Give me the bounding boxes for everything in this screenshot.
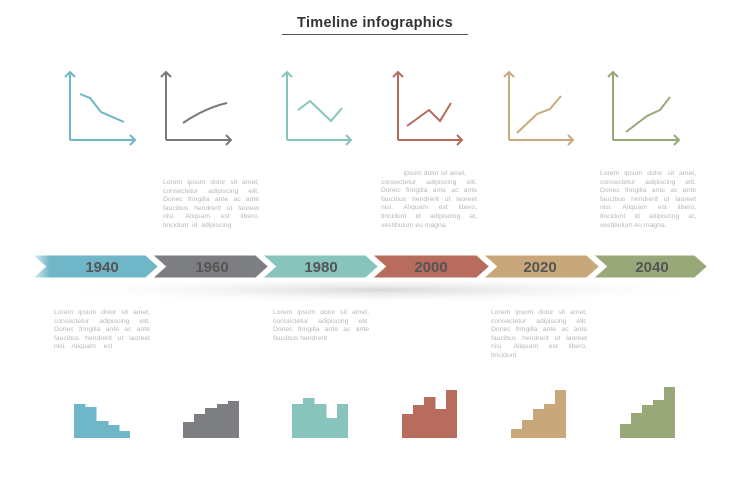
text 2040: nisi. Aliquam est libero, — [600, 204, 696, 211]
text 1980: consectetur adipiscing elit. — [273, 318, 369, 325]
text 1980: Lorem ipsum dolor sit amet, — [273, 309, 369, 316]
text 2020: Donec fringilla ante ac ante — [491, 326, 587, 333]
title: Timeline infographics — [297, 15, 453, 31]
text 1940: nisi. Aliquam est — [54, 343, 113, 350]
bar chart 1960 — [183, 401, 239, 438]
bar chart 2020 — [511, 390, 566, 438]
text 2020: consectetur adipiscing elit. — [491, 318, 587, 325]
text 1940: Donec fringilla ante ac ante — [54, 326, 150, 333]
text 2000 — [381, 170, 477, 229]
text 2020: Lorem ipsum dolor sit amet, — [491, 309, 587, 316]
chart 1940 — [65, 72, 135, 145]
text 2000: tincidunt id adipiscing at, — [381, 213, 477, 220]
chart 2020 — [504, 72, 573, 145]
text 2040: faucibus hendrerit ut laoreet — [600, 196, 696, 203]
text 2040: Lorem ipsum dolor sit amet, — [600, 170, 696, 177]
text 2000: vestibulum eu magna. — [381, 222, 448, 229]
bar chart 1940 — [74, 404, 130, 438]
bar chart 2040 — [620, 387, 675, 438]
chart 1980 — [282, 72, 351, 145]
text 2000: nisi. Aliquam est libero, — [381, 204, 477, 211]
chart 1960 — [161, 72, 231, 145]
text 2020 — [491, 309, 587, 359]
chart 2000 — [393, 72, 462, 145]
text 2000: Donec fringilla ante ac ante — [381, 187, 477, 194]
text 1960: Donec fringilla ante ac ante — [163, 196, 259, 203]
timeline arrows: 2000 — [414, 259, 448, 276]
text 1980 — [273, 309, 369, 342]
text 2040: tincidunt id adipiscing at, — [600, 213, 696, 220]
text 2040: Donec fringilla ante ac ante — [600, 187, 696, 194]
text 2020: tincidunt — [491, 352, 516, 359]
text 1960: nisi. Aliquam est libero, — [163, 213, 259, 220]
text 2040: consectetur adipiscing elit. — [600, 179, 696, 186]
text 2000: consectetur adipiscing elit. — [381, 179, 477, 186]
text 2020: nisi. Aliquam est libero, — [491, 343, 587, 350]
timeline arrows: 2020 — [523, 259, 557, 276]
timeline arrows — [28, 252, 709, 281]
chart 2040 — [608, 72, 679, 145]
text 1960: Lorem ipsum dolor sit amet, — [163, 179, 259, 186]
title — [282, 15, 468, 35]
timeline arrows: 2040 — [635, 259, 669, 276]
text 1980: faucibus hendrerit — [273, 335, 327, 342]
text 1940: consectetur adipiscing elit. — [54, 318, 150, 325]
text 2000: ipsum dolor sit amet, — [404, 170, 466, 177]
text 1960: tincidunt id adipiscing — [163, 222, 231, 229]
text 1960: faucibus hendrerit ut laoreet — [163, 205, 259, 212]
bar chart 2000 — [402, 390, 457, 438]
timeline arrows: 1960 — [195, 259, 229, 276]
text 2040: vestibulum eu magna. — [600, 222, 666, 229]
text 1980: Donec fringilla ante ac ante — [273, 326, 369, 333]
bar chart 1980 — [292, 398, 348, 438]
text 2020: faucibus hendrerit ut laoreet — [491, 335, 587, 342]
text 1960: consectetur adipiscing elit. — [163, 188, 259, 195]
text 1940 — [54, 309, 150, 350]
text 2040 — [600, 170, 696, 229]
text 1960 — [163, 179, 259, 229]
timeline arrows: 1980 — [304, 259, 338, 276]
shadow — [40, 276, 720, 304]
text 1940: Lorem ipsum dolor sit amet, — [54, 309, 150, 316]
text 2000: faucibus hendrerit ut laoreet — [381, 196, 477, 203]
text 1940: faucibus hendrerit ut laoreet — [54, 335, 150, 342]
timeline arrows: 1940 — [85, 259, 119, 276]
